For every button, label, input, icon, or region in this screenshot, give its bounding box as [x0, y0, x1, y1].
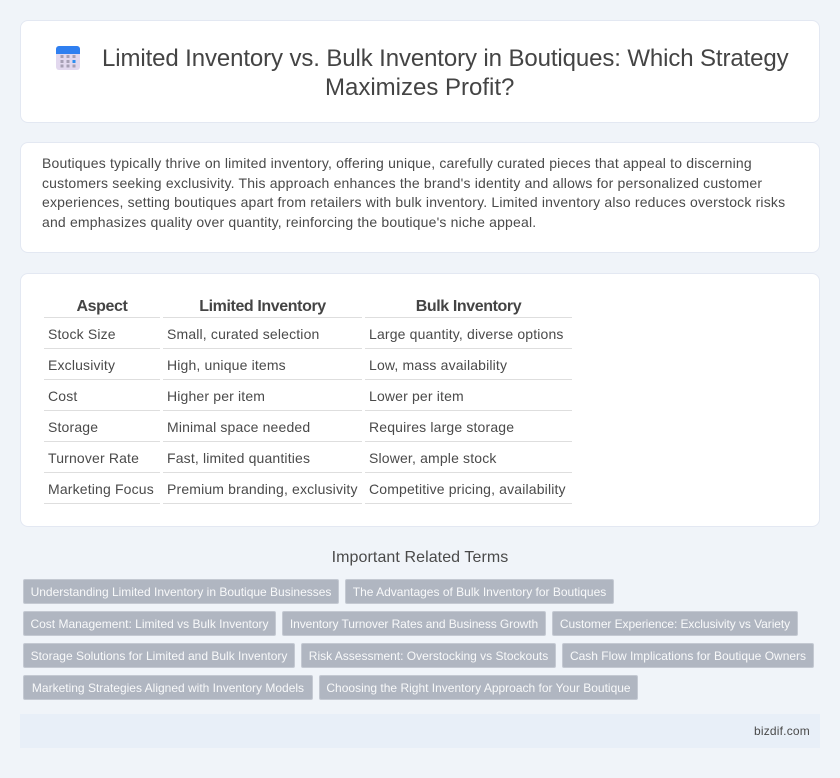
tag: Choosing the Right Inventory Approach for Your Boutique	[326, 681, 631, 695]
row: cost	[48, 388, 464, 404]
row: marketing focus	[48, 481, 566, 497]
row: turnover rate: Slower, ample stock	[369, 450, 497, 466]
tag: Risk Assessment: Overstocking vs Stockouts	[309, 649, 548, 663]
table headers: Limited Inventory	[199, 298, 326, 315]
row: stock size: Stock Size	[48, 326, 116, 342]
icon: calendar	[56, 46, 80, 70]
intro paragraph: Boutiques typically thrive on limited inventory, offering unique, carefully curated pieces that appeal to discerning	[42, 155, 752, 171]
related terms heading: Important Related Terms	[332, 549, 508, 566]
row: turnover rate: Turnover Rate	[48, 450, 139, 466]
row: marketing focus: Competitive pricing, availability	[369, 481, 566, 497]
table headers: Bulk Inventory	[416, 298, 521, 315]
row: cost: Lower per item	[369, 388, 464, 404]
tag	[282, 611, 546, 636]
intro paragraph: experiences, setting boutiques apart from retailers with bulk inventory. Limited inventory also reduces overstock risks	[42, 194, 785, 210]
row: exclusivity	[48, 357, 507, 373]
intro paragraph	[42, 155, 785, 230]
footer	[20, 714, 820, 748]
table headers	[76, 298, 522, 315]
row: storage: Storage	[48, 419, 98, 435]
tag: The Advantages of Bulk Inventory for Boutiques	[353, 585, 606, 599]
row: storage	[48, 419, 514, 435]
table headers: Aspect	[77, 298, 127, 315]
title	[102, 45, 789, 101]
source credit: bizdif.com	[754, 724, 810, 738]
tag	[301, 643, 556, 668]
tag: Storage Solutions for Limited and Bulk Inventory	[31, 649, 287, 663]
row: stock size: Small, curated selection	[167, 326, 319, 342]
intro paragraph: customers seeking exclusivity. This approach enhances the brand's identity and allows for personalized customer	[42, 174, 762, 190]
panel: comparison table	[20, 273, 820, 527]
intro paragraph: and emphasizes quality over quantity, reinforcing the boutique's niche appeal.	[42, 214, 536, 230]
panel: intro text	[20, 142, 820, 253]
tag	[23, 611, 276, 636]
row: cost: Cost	[48, 388, 77, 404]
row: turnover rate: Fast, limited quantities	[167, 450, 310, 466]
related terms tags	[23, 579, 814, 700]
row: cost: Higher per item	[167, 388, 265, 404]
row: marketing focus: Marketing Focus	[48, 481, 154, 497]
row: exclusivity: Exclusivity	[48, 357, 115, 373]
row: stock size	[48, 326, 564, 342]
row: exclusivity: Low, mass availability	[369, 357, 507, 373]
row: stock size: Large quantity, diverse options	[369, 326, 564, 342]
tag: Customer Experience: Exclusivity vs Variety	[560, 617, 790, 631]
panel: title card	[20, 20, 820, 123]
tag: Inventory Turnover Rates and Business Growth	[290, 617, 538, 631]
tag: Cash Flow Implications for Boutique Owners	[570, 649, 806, 663]
row: turnover rate	[48, 450, 497, 466]
tag: Understanding Limited Inventory in Boutique Businesses	[31, 585, 331, 599]
row: marketing focus: Premium branding, exclusivity	[167, 481, 358, 497]
row: exclusivity: High, unique items	[167, 357, 286, 373]
tag	[319, 675, 638, 700]
tag	[562, 643, 814, 668]
row: storage: Requires large storage	[369, 419, 514, 435]
tag: Cost Management: Limited vs Bulk Inventory	[30, 617, 269, 631]
title: Maximizes Profit?	[325, 74, 514, 101]
tag: Marketing Strategies Aligned with Inventory Models	[32, 681, 304, 695]
tag	[552, 611, 798, 636]
tag	[23, 579, 339, 604]
row: storage: Minimal space needed	[167, 419, 310, 435]
tag	[23, 675, 313, 700]
title: Limited Inventory vs. Bulk Inventory in Boutiques: Which Strategy	[102, 45, 789, 72]
tag	[345, 579, 614, 604]
tag	[23, 643, 295, 668]
